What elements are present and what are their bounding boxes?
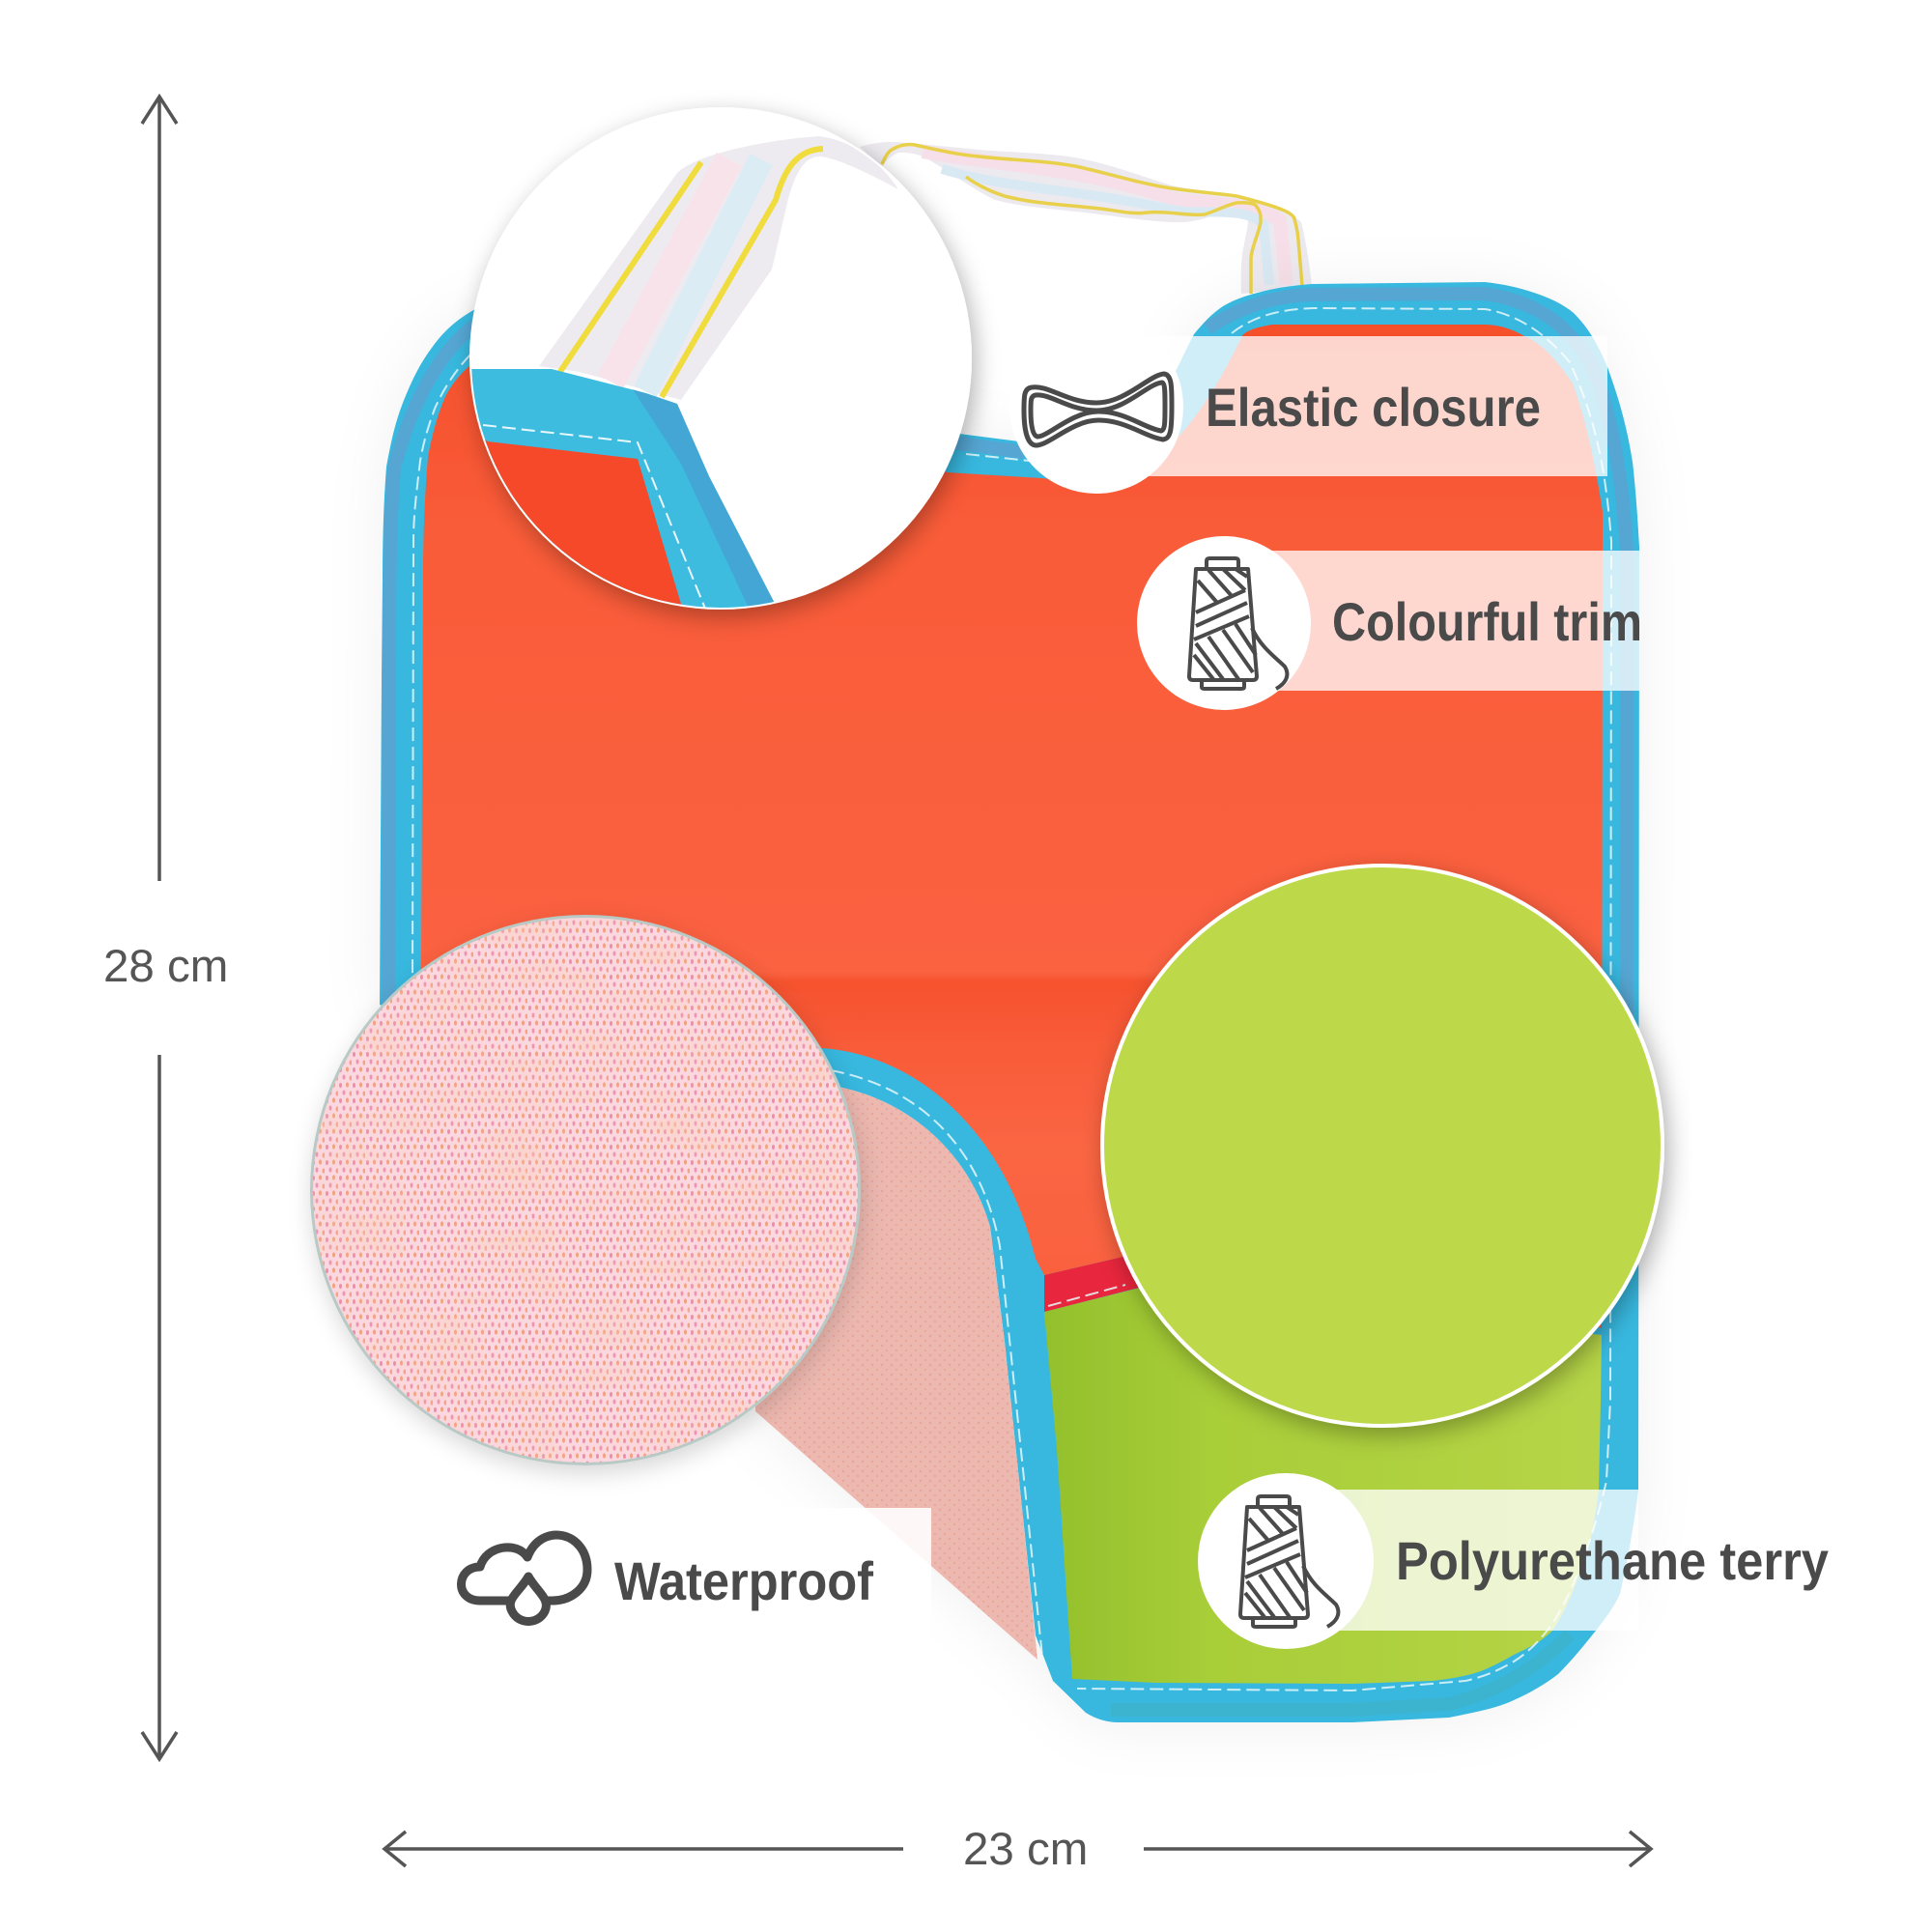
bib body — [380, 282, 1639, 1722]
waterproof feature — [461, 1535, 873, 1621]
dimension label: width: 23 cm — [963, 1824, 1088, 1875]
icon: elastic band — [1024, 374, 1172, 445]
label: waterproof: Waterproof — [614, 1550, 873, 1611]
label: colourful trim: Colourful trim — [1332, 591, 1642, 652]
detail circle: pink terry — [309, 913, 861, 1468]
label: elastic closure: Elastic closure — [1206, 377, 1541, 438]
label: polyurethane terry: Polyurethane terry — [1396, 1530, 1829, 1591]
colourful trim feature — [1137, 536, 1642, 710]
dimension: width arrow — [384, 1832, 1651, 1866]
fold underside — [755, 1053, 1037, 1660]
icon circle: spool — [1198, 1473, 1374, 1649]
blue trim — [380, 282, 1639, 1722]
zoomed orange — [485, 440, 682, 605]
polyurethane terry feature — [1198, 1473, 1829, 1649]
icon: thread spool — [1189, 558, 1287, 689]
green back panel — [1044, 1283, 1602, 1684]
red inner trim — [1044, 1241, 1188, 1312]
label strip: waterproof — [580, 1508, 931, 1649]
strap pastel stripes — [923, 152, 1287, 285]
trim woven shade — [382, 287, 1634, 1017]
zoomed trim — [464, 369, 782, 618]
zoomed elastic — [539, 136, 898, 400]
trim stitching — [412, 308, 1611, 1690]
strap yellow threads — [882, 145, 1302, 294]
trim bottom shade — [1111, 1634, 1570, 1710]
icon: thread spool — [1240, 1496, 1338, 1627]
dimension: height arrow — [142, 97, 177, 1759]
zoomed stitching — [483, 425, 705, 609]
dimension label: height: 28 cm — [103, 941, 228, 992]
label strip: colourful trim — [1224, 551, 1639, 691]
icon: cloud with drop — [461, 1535, 587, 1621]
strap body — [860, 142, 1312, 294]
orange front — [421, 325, 1603, 1328]
elastic closure feature — [1009, 320, 1541, 494]
detail circle: green polyurethane — [1102, 866, 1662, 1426]
icon circle: spool — [1137, 536, 1311, 710]
label strip: polyurethane terry — [1286, 1490, 1638, 1631]
icon circle: elastic — [1009, 320, 1183, 494]
detail circle: elastic and trim — [464, 107, 972, 628]
zoomed trim shade — [633, 389, 775, 607]
label strip: elastic closure — [1096, 336, 1607, 476]
elastic strap — [860, 142, 1312, 294]
